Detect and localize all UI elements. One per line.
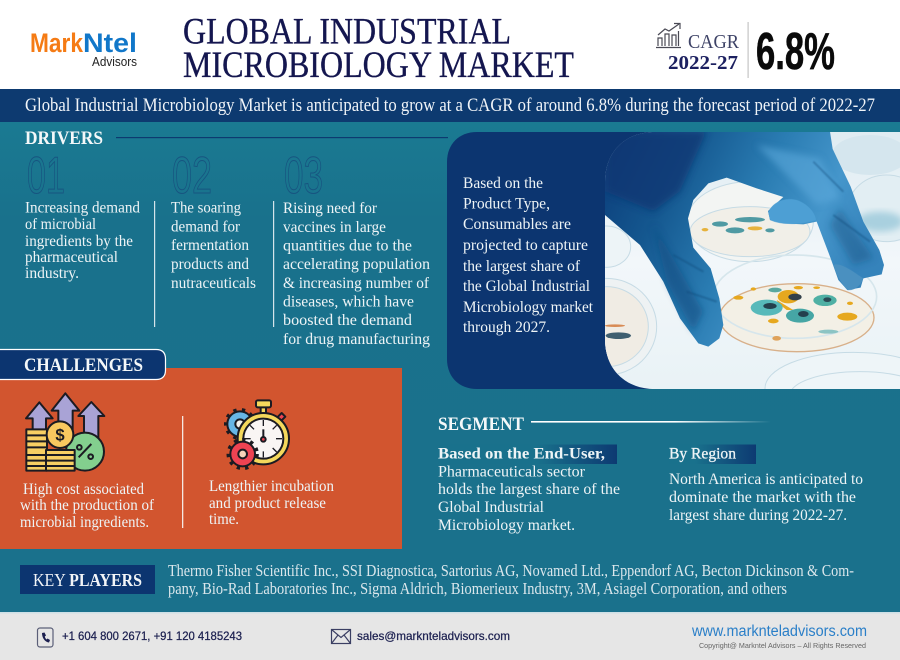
challenge 1 text	[20, 479, 155, 531]
driver 3 text: boosted the demand	[283, 310, 412, 329]
logo: MarkNtel Advisors	[30, 28, 137, 69]
callout text: Product Type,	[463, 194, 550, 212]
number 01: 01	[27, 147, 65, 205]
summary banner	[0, 89, 900, 122]
phone numbers: +1 604 800 2671, +91 120 4185243	[62, 629, 242, 643]
icon: stopwatch and gears	[226, 400, 289, 468]
panel: key players	[20, 561, 854, 598]
number 03: 03	[284, 147, 323, 205]
challenge 1 text: with the production of	[20, 495, 155, 514]
challenge 2 text: Lengthier incubation	[209, 476, 334, 495]
segment: by region: largest share during 2022-27.	[669, 505, 847, 524]
challenge 1 text: High cost associated	[23, 479, 144, 498]
driver 2 text: demand for	[171, 216, 241, 236]
panel: challenges	[0, 350, 402, 549]
callout text: through 2027.	[463, 317, 550, 336]
CAGR years: 2022-27	[668, 52, 738, 74]
driver 3 text	[283, 198, 430, 348]
driver 2 text	[171, 198, 256, 292]
driver 3 text: diseases, which have	[283, 292, 414, 310]
callout text: Consumables are	[463, 214, 571, 233]
callout text	[463, 173, 593, 336]
driver 1 text: ingredients by the	[25, 231, 133, 250]
segment: end-user: Microbiology market.	[438, 515, 575, 534]
driver 1 text: Increasing demand	[25, 198, 140, 216]
icon: rising cost	[26, 393, 104, 471]
callout text: Based on the	[463, 173, 543, 192]
driver 2 text: nutraceuticals	[171, 273, 256, 292]
logo: MarkNtel Advisors: Mark	[30, 28, 83, 58]
main dish	[719, 284, 874, 352]
email: sales@marknteladvisors.com	[357, 629, 510, 643]
icon: phone	[38, 628, 53, 647]
driver 2 text: The soaring	[171, 198, 241, 216]
heading: drivers: DRIVERS	[25, 129, 103, 149]
callout text: projected to capture	[463, 235, 588, 254]
heading tab: challenges	[0, 350, 166, 380]
background dishes	[605, 132, 900, 389]
header background	[0, 0, 900, 90]
driver 1 text: pharmaceutical	[25, 247, 118, 266]
segment: by region: By Region	[669, 444, 736, 462]
segment: end-user: Based on the End-User,	[438, 444, 605, 462]
callout text: the Global Industrial	[463, 276, 590, 295]
driver 3 text: for drug manufacturing	[283, 329, 430, 348]
heading tab: challenges: CHALLENGES	[24, 356, 143, 376]
segment: end-user: Pharmaceuticals sector	[438, 462, 586, 480]
teal body background	[0, 122, 900, 612]
driver 2 text: products and	[171, 254, 249, 273]
copyright: Copyright@ Markntel Advisors – All Rights Reserved	[699, 641, 866, 650]
segment: by region: North America is anticipated to	[669, 469, 863, 488]
challenge 2 text	[209, 476, 334, 528]
footer	[0, 612, 900, 660]
panel: drivers	[25, 129, 448, 348]
driver 3 text: vaccines in large	[283, 217, 386, 236]
heading: segment: SEGMENT	[438, 415, 525, 435]
driver 1 text: industry.	[25, 263, 79, 282]
title: MICROBIOLOGY MARKET	[183, 44, 574, 85]
callout text: Microbiology market	[463, 297, 593, 316]
website: www.marknteladvisors.com	[691, 623, 867, 640]
driver 3 text: Rising need for	[283, 198, 378, 217]
glove	[605, 132, 884, 347]
driver 2 text: fermentation	[171, 235, 249, 254]
driver 3 text: accelerating population	[283, 254, 430, 273]
driver 3 text: & increasing number of	[283, 273, 430, 292]
segment: by region	[669, 444, 863, 524]
icon: mail	[332, 630, 350, 644]
logo: MarkNtel Advisors: Ntel	[83, 28, 137, 58]
segment: end-user: holds the largest share of the	[438, 479, 620, 498]
panel: segment	[438, 415, 863, 534]
title: GLOBAL INDUSTRIAL	[183, 10, 511, 52]
key players list: pany, Bio-Rad Laboratories Inc., Sigma Aldrich, Biomerieux Industry, 3M, Asiagel Corporation, and others	[168, 579, 787, 598]
driver 3 text: quantities due to the	[283, 236, 412, 254]
challenge 1 text: microbial ingredients.	[20, 512, 149, 531]
panel: product type callout with photo	[447, 132, 900, 389]
CAGR value: 6.8%	[756, 23, 835, 81]
number 02: 02	[172, 147, 212, 205]
icon: growth chart	[656, 24, 681, 48]
driver 1 text	[25, 198, 140, 282]
challenge 2 text: time.	[209, 509, 239, 528]
icon: rising cost: $	[55, 426, 65, 445]
CAGR badge	[656, 22, 835, 81]
key players label: KEY PLAYERS	[33, 570, 142, 590]
key players label	[20, 565, 155, 594]
driver 1 text: of microbial	[25, 214, 96, 233]
CAGR label: CAGR	[688, 31, 740, 53]
segment: end-user	[438, 444, 620, 534]
key players list	[168, 561, 854, 598]
segment: end-user: Global Industrial	[438, 497, 544, 516]
segment: by region: dominate the market with the	[669, 487, 856, 506]
logo: MarkNtel Advisors: Advisors	[92, 54, 137, 69]
callout text: the largest share of	[463, 256, 581, 275]
challenge 2 text: and product release	[209, 493, 326, 512]
photo: gloved hand with petri dishes	[605, 132, 900, 389]
title	[183, 10, 574, 85]
glove shading	[605, 132, 873, 332]
